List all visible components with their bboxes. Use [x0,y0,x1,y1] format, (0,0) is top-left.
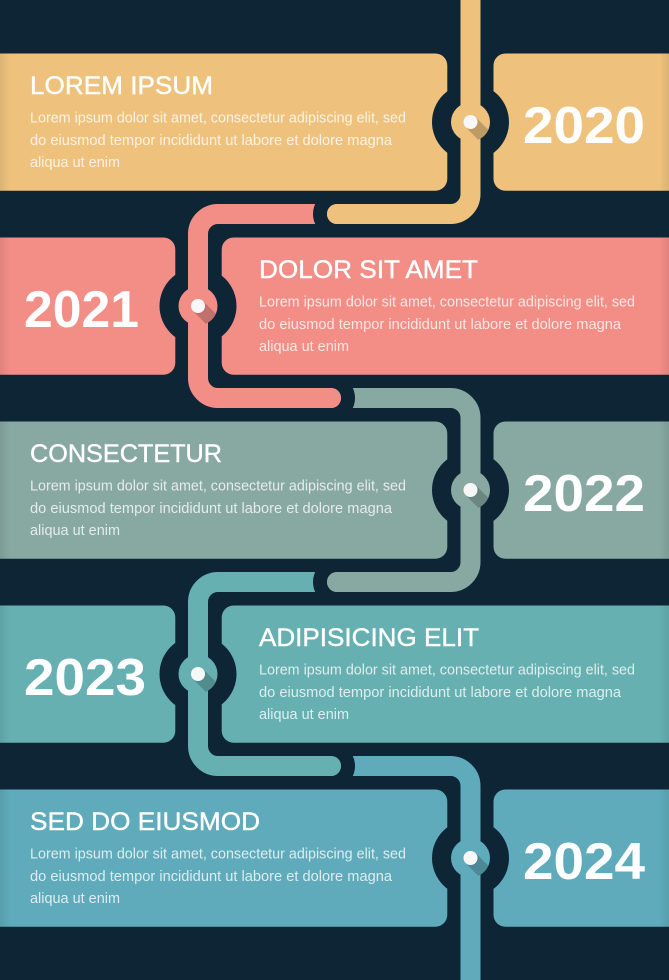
panel: 2021 text [222,238,669,375]
year: 2024: 2024 [523,833,645,891]
pipe: 2022 [337,398,470,582]
text block: 2022 description: Lorem ipsum dolor sit amet, consectetur adipiscing elit, sed [30,478,406,494]
text block: 2020 description: Lorem ipsum dolor sit amet, consectetur adipiscing elit, sed [30,110,406,126]
pipe: 2020 [337,0,470,214]
pipe: 2021 [198,214,331,398]
panel: 2021 year [0,238,175,375]
year: 2023: 2023 [24,649,146,707]
pipe: 2023 [198,582,331,766]
text block: 2023 description: Lorem ipsum dolor sit amet, consectetur adipiscing elit, sed [259,662,635,678]
text block: 2021 description: aliqua ut enim [259,339,349,355]
heading: lorem ipsum: LOREM IPSUM [30,72,213,100]
text block: 2020 description: do eiusmod tempor incididunt ut labore et dolore magna [30,133,393,149]
panel: 2022 text [0,422,447,559]
year: 2022: 2022 [523,465,645,523]
panel: 2024 text [0,790,447,927]
text block: 2020 description: aliqua ut enim [30,155,120,171]
text block: 2022 description: aliqua ut enim [30,523,120,539]
node: 2023 [178,657,218,692]
pipe: 2024 [345,766,470,980]
text block: 2024 description: aliqua ut enim [30,891,120,907]
notch: 2022 [432,452,509,528]
panel: 2020 text [0,54,447,191]
node: 2021 [178,289,218,324]
text block: 2021 description: Lorem ipsum dolor sit amet, consectetur adipiscing elit, sed [259,294,635,310]
text block: 2024 description [30,846,406,907]
text block: 2022 description: do eiusmod tempor incididunt ut labore et dolore magna [30,501,393,517]
text block: 2024 description: do eiusmod tempor incididunt ut labore et dolore magna [30,869,393,885]
heading: consectetur: CONSECTETUR [30,440,222,468]
notch: 2024 [432,820,509,896]
heading: dolor sit amet: DOLOR SIT AMET [259,256,478,284]
panel: 2024 year [494,790,669,927]
year: 2021: 2021 [24,281,139,339]
notch: 2020 [432,84,509,160]
pipe end: 2023 [321,756,341,776]
panel: 2022 year [494,422,669,559]
panel: 2023 text [222,606,669,743]
pipe gap: 2023 to 2024 [338,756,355,776]
text block: 2024 description: Lorem ipsum dolor sit amet, consectetur adipiscing elit, sed [30,846,406,862]
heading: sed do eiusmod: SED DO EIUSMOD [30,808,260,836]
pipe gap: 2022 to 2023 [313,572,328,592]
pipe gap: 2021 to 2022 [338,388,355,408]
heading: adipisicing elit: ADIPISICING ELIT [259,624,479,652]
node: 2024 [451,841,490,876]
text block: 2020 description [30,110,406,171]
text block: 2021 description [259,294,635,355]
notch: 2021 [160,268,236,344]
panel: 2020 year [494,54,669,191]
pipe end: 2021 [321,388,341,408]
text block: 2021 description: do eiusmod tempor incididunt ut labore et dolore magna [259,317,622,333]
node: 2020 [451,105,490,140]
text block: 2023 description [259,662,635,723]
year: 2020: 2020 [523,97,645,155]
pipe end: 2020 [327,204,347,224]
panel: 2023 year [0,606,175,743]
pipe end: 2022 [327,572,347,592]
notch: 2023 [160,636,236,712]
text block: 2023 description: aliqua ut enim [259,707,349,723]
text block: 2023 description: do eiusmod tempor incididunt ut labore et dolore magna [259,685,622,701]
pipe gap: 2020 to 2021 [313,204,328,224]
text block: 2022 description [30,478,406,539]
node: 2022 [451,473,490,508]
